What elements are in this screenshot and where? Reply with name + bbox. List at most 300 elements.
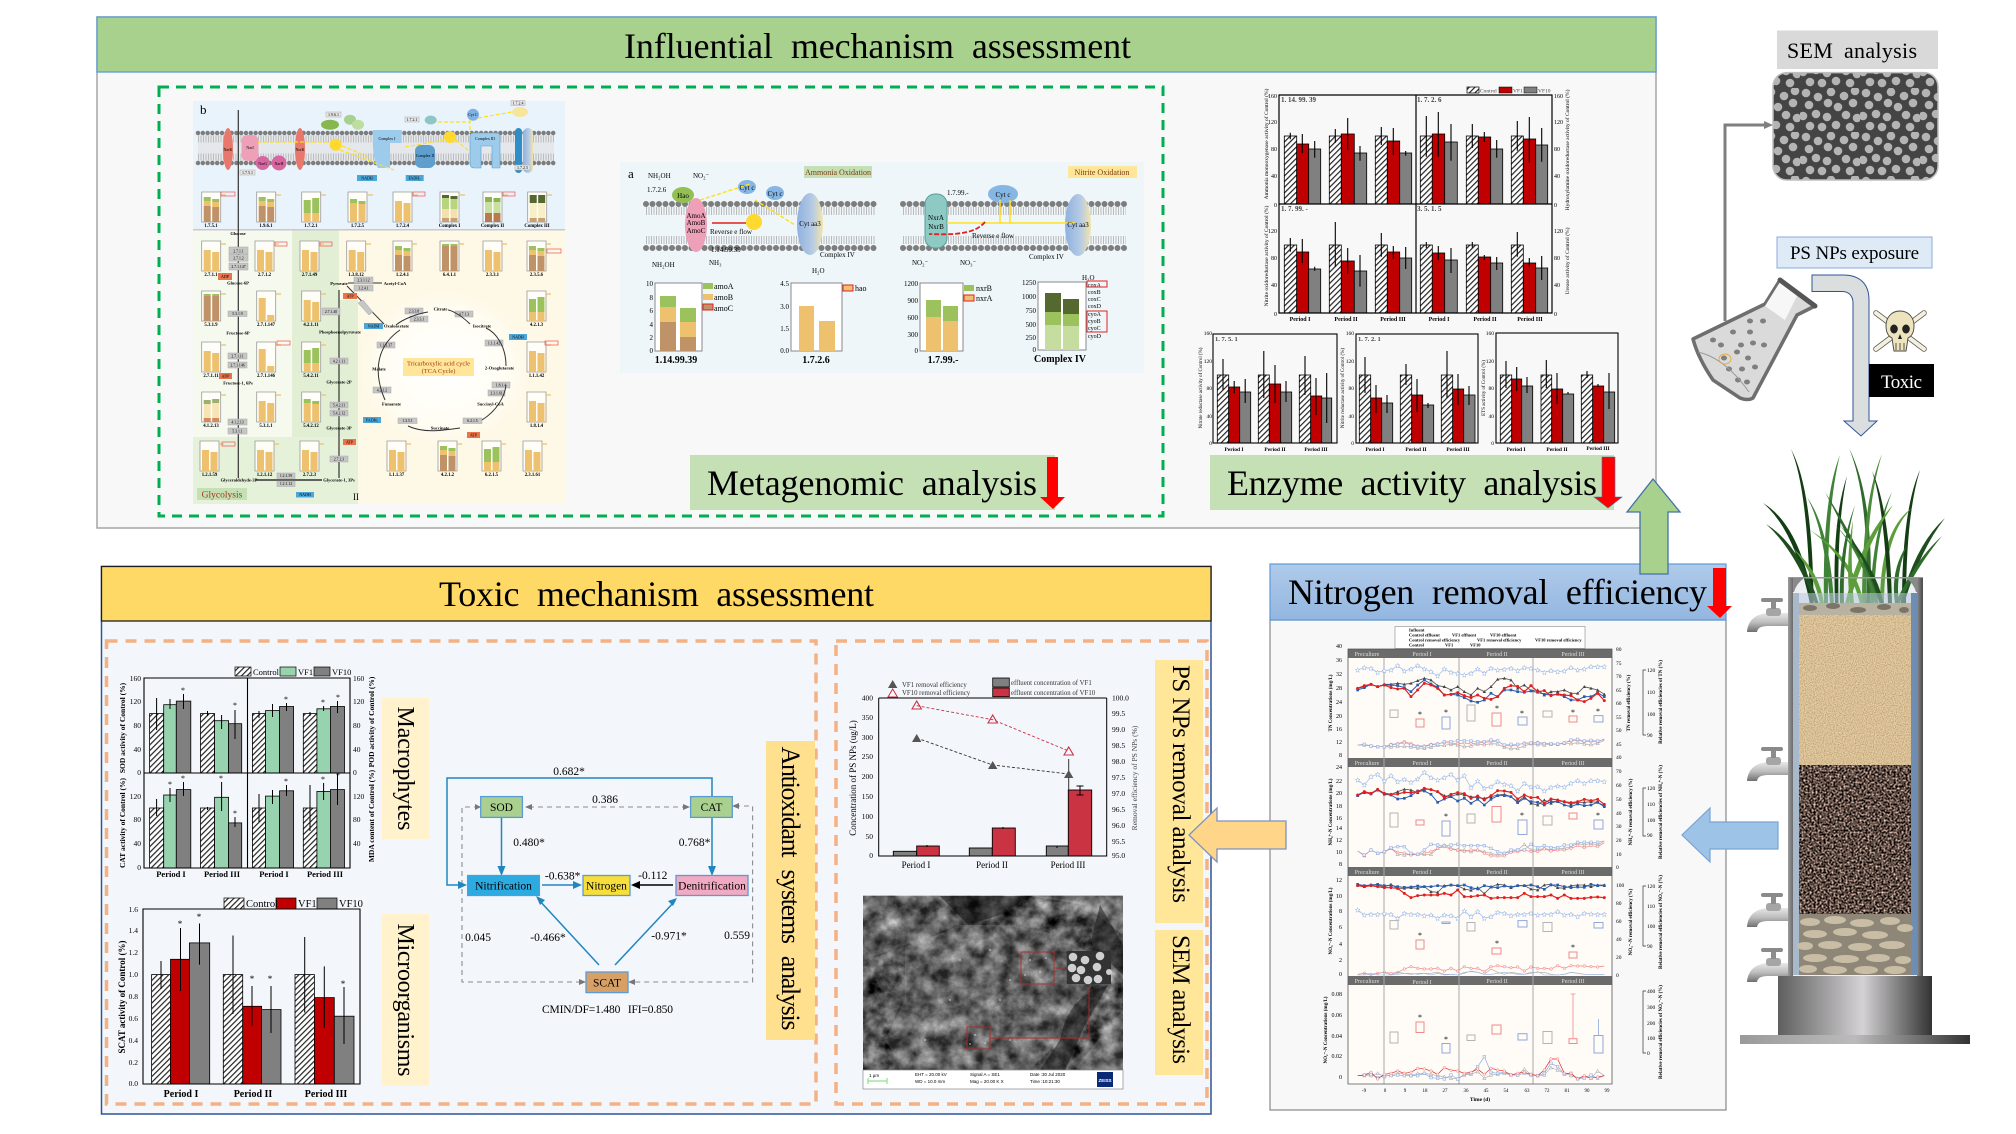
mini bar charts: 1.8.1.4 bbox=[530, 424, 544, 429]
label: PS NPs exposure bbox=[1777, 237, 1932, 268]
mini bar charts: Complex III bbox=[524, 224, 550, 229]
error bars bbox=[157, 694, 338, 831]
time series charts: * bbox=[1444, 1035, 1448, 1044]
axes: 40 bbox=[134, 745, 141, 754]
axes labels: nitrogen charts: 0 bbox=[1616, 973, 1619, 979]
mini bar charts: 1.2.4.1 bbox=[396, 273, 410, 278]
enzyme box labels: 4.7.1.3 bbox=[459, 312, 469, 316]
chart: ETS: 120 bbox=[1486, 359, 1494, 365]
axes labels: nitrogen charts: 8 bbox=[1339, 753, 1342, 759]
caption strip: Signal A = SE1 bbox=[970, 1072, 1000, 1077]
cofactor tags: NADH bbox=[512, 334, 524, 340]
mini bar charts: 2.3.1.61 bbox=[525, 473, 541, 478]
axes labels: nitrogen charts: 40 bbox=[1616, 937, 1622, 943]
enzyme box labels: 2.3.3.8 bbox=[409, 310, 419, 314]
legend: VF10 bbox=[1538, 88, 1551, 94]
mini bar charts: 2.7.1.2 bbox=[258, 273, 272, 278]
chart: 1.7.99.-: 0 bbox=[914, 347, 918, 355]
chart: 1.7.2.1: Period III bbox=[1446, 447, 1470, 453]
mini bar charts: 2.7.1.49 bbox=[302, 273, 318, 278]
axes labels: nitrogen charts: 55 bbox=[1616, 715, 1622, 721]
chart: complex IV: 1000 bbox=[1022, 293, 1036, 301]
heading: nitrogen removal efficiency bbox=[1270, 564, 1726, 620]
error bars bbox=[161, 924, 344, 1044]
time series charts: Period II bbox=[1486, 979, 1508, 985]
axes: 1.6 bbox=[129, 905, 138, 914]
orange dashed frame: antioxidant systems bbox=[106, 641, 816, 1104]
time series charts: * bbox=[1495, 939, 1499, 948]
metabolite labels: Phosphoenolpyruvate bbox=[319, 330, 361, 334]
axes labels: nitrogen charts: 60 bbox=[1616, 783, 1622, 789]
row: NO3 bbox=[1358, 884, 1604, 975]
chart: 1.7.2.6: 4.5 bbox=[780, 280, 790, 288]
mini bar charts: 4.2.1.11 bbox=[303, 323, 319, 328]
cofactor tags: ATP bbox=[346, 440, 354, 444]
orange dashed frame: removal and SEM bbox=[836, 641, 1207, 1104]
enzyme box labels: 2.7.1.1 bbox=[233, 250, 244, 254]
legend box bbox=[1395, 626, 1585, 648]
panel tags and axes: 0 bbox=[1554, 312, 1557, 318]
enzyme box labels: 1.8.1.4 bbox=[496, 384, 506, 388]
cofactor tags: NADH bbox=[368, 324, 379, 328]
enzyme box labels: 2.3.1.12 bbox=[357, 278, 370, 282]
panel tags and axes: Period II bbox=[1473, 317, 1497, 323]
axes labels: nitrogen charts: 27 bbox=[1442, 1089, 1448, 1094]
axes labels: nitrogen charts: 60 bbox=[1616, 919, 1622, 925]
proteins: Complex IV bbox=[1029, 253, 1064, 261]
chart: 1.7.2.1: 80 bbox=[1348, 386, 1354, 392]
proteins: NxrB bbox=[928, 223, 944, 231]
TCA cycle bbox=[372, 306, 514, 431]
axes labels: nitrogen charts: 50 bbox=[1616, 797, 1622, 803]
panel: toxic mechanism assessment bbox=[102, 566, 1211, 1114]
chart: 1.7.2.1: Period I bbox=[1365, 447, 1385, 453]
column walls bbox=[1788, 578, 1923, 981]
proteins: NO₂⁻ bbox=[693, 172, 710, 180]
axes: 40 bbox=[353, 839, 361, 848]
mini bar charts: 4.1.2.13 bbox=[203, 424, 219, 429]
axes: Period I bbox=[156, 869, 186, 879]
proteins: Reverse e flow bbox=[972, 232, 1015, 240]
chart: 1.7.99.-: 1.7.99.- bbox=[928, 355, 958, 366]
figure a: ammonia and nitrite oxidation: a bbox=[628, 166, 634, 181]
label: antioxidant systems analysis bbox=[766, 741, 815, 1040]
arrow: column to nitrogen bbox=[1682, 808, 1778, 862]
legend box: VF1 removal efficiency bbox=[1477, 638, 1522, 642]
caption strip: Time :10:21:30 bbox=[1030, 1079, 1060, 1084]
inset bbox=[1067, 951, 1112, 984]
chart: 1.14.99.39: 6 bbox=[650, 307, 654, 315]
proteins: NxrA bbox=[928, 214, 944, 222]
axes: 120 bbox=[130, 792, 141, 801]
chart: complex IV: cyoC bbox=[1088, 326, 1101, 332]
panel tags and axes: 1. 7. 99. - bbox=[1281, 205, 1308, 213]
axes labels: nitrogen charts: 0.04 bbox=[1332, 1034, 1342, 1040]
label: PS NPs removal analysis bbox=[1155, 660, 1203, 923]
TCA label: Tricarboxylic acid cycle bbox=[407, 360, 470, 368]
legend box: VF10 effluent bbox=[1490, 632, 1517, 638]
chart: PS NPs removal: Period I bbox=[902, 860, 930, 870]
chart: 1.7.2.6: 3.0 bbox=[780, 303, 790, 311]
chart: 1.7.5.1: 0 bbox=[1209, 441, 1212, 447]
panel tags and axes: Period I bbox=[1429, 317, 1450, 323]
cofactor tags: ADP bbox=[221, 274, 230, 279]
axes labels: nitrogen charts: 10 bbox=[1336, 894, 1342, 900]
panel tags and axes: 0 bbox=[1274, 312, 1277, 318]
chart: 1.7.2.1: 40 bbox=[1348, 414, 1354, 420]
proteins: Cyt c bbox=[768, 190, 782, 198]
proteins: AmoA bbox=[686, 212, 706, 220]
axes labels: nitrogen charts: 0 bbox=[1647, 1051, 1650, 1057]
panel tags and axes: 80 bbox=[1271, 147, 1277, 153]
chart: complex IV bbox=[1022, 279, 1107, 365]
path coefficients: 0.480* bbox=[513, 837, 545, 849]
axes labels: nitrogen charts: 0 bbox=[1339, 972, 1342, 978]
chart: 1.7.5.1: Period I bbox=[1224, 447, 1244, 453]
membrane proteins: NorK bbox=[295, 147, 305, 152]
axes: 40 bbox=[134, 839, 141, 848]
metabolic pathway map: b bbox=[200, 102, 206, 117]
enzyme box labels: 6.2.1.5 bbox=[467, 419, 478, 423]
arrow: nitrogen to influential mechanism bbox=[1627, 479, 1680, 574]
axes: * bbox=[168, 780, 172, 789]
time series charts: Period I bbox=[1412, 761, 1432, 767]
enzyme box labels: 2.7.1.40 bbox=[325, 310, 337, 314]
time series charts: * bbox=[1444, 708, 1448, 717]
chart: PS NPs removal: 99.5 bbox=[1112, 709, 1125, 718]
axes labels: nitrogen charts: 2 bbox=[1339, 958, 1342, 964]
TCA cycle: Isocitrate bbox=[473, 324, 491, 328]
proteins: Cyt c bbox=[740, 184, 754, 192]
proteins: AmoB bbox=[687, 219, 706, 227]
axes labels: nitrogen charts: 18 bbox=[1336, 804, 1342, 810]
axes labels: nitrogen charts: 24 bbox=[1336, 765, 1342, 771]
panel tags and axes: Period I bbox=[1290, 317, 1311, 323]
chart: PS NPs removal: 250 bbox=[862, 752, 873, 761]
axes labels: nitrogen charts: 70 bbox=[1616, 769, 1622, 775]
axes labels: nitrogen charts: 20 bbox=[1336, 714, 1342, 720]
chart: complex IV: 750 bbox=[1026, 307, 1036, 315]
axes labels: nitrogen charts: 0.02 bbox=[1332, 1054, 1342, 1060]
label: PS NPs exposure: PS NPs exposure bbox=[1790, 243, 1919, 264]
label: enzyme activity analysis bbox=[1210, 455, 1614, 510]
glycolysis pathway lines bbox=[238, 110, 384, 480]
axes labels: nitrogen charts: 110 bbox=[1647, 690, 1655, 696]
chart: ETS bbox=[1482, 331, 1618, 453]
legend box: VF1 bbox=[1445, 642, 1454, 648]
axes: Period III bbox=[305, 1089, 347, 1100]
constructed wetland column bbox=[1740, 448, 1970, 1044]
axes labels: nitrogen charts: 90 bbox=[1647, 833, 1653, 839]
legend bbox=[1467, 87, 1551, 94]
axes: * bbox=[233, 809, 237, 818]
caption strip: ZEISS bbox=[1098, 1078, 1112, 1083]
axes labels: nitrogen charts: 24 bbox=[1336, 700, 1342, 706]
time series charts: * bbox=[1571, 708, 1575, 717]
axes labels: nitrogen charts: 50 bbox=[1616, 728, 1622, 734]
time series charts: Preculture bbox=[1355, 652, 1380, 658]
axes labels: nitrogen charts: 75 bbox=[1616, 661, 1622, 667]
panel tags and axes: Period II bbox=[1334, 317, 1358, 323]
axes labels: nitrogen charts: 28 bbox=[1336, 686, 1342, 692]
cofactor tags: ATP bbox=[470, 432, 478, 438]
axes: CAT activity of Control (%) bbox=[118, 778, 127, 868]
label: microorganisms bbox=[382, 914, 429, 1086]
axes labels: nitrogen charts: 200 bbox=[1647, 1021, 1656, 1027]
chart: PS NPs removal: 99.0 bbox=[1112, 725, 1125, 734]
legend: VF1 bbox=[298, 899, 317, 910]
axes: * bbox=[284, 777, 288, 786]
axes labels: nitrogen charts: 12 bbox=[1336, 878, 1342, 884]
SEM micrograph bbox=[863, 896, 1123, 1089]
enzyme activity charts bbox=[1199, 87, 1618, 453]
time series charts: Period III bbox=[1561, 979, 1585, 985]
mini bar charts: 4.2.1.3 bbox=[530, 323, 544, 328]
proteins: H₂O bbox=[812, 267, 825, 275]
panel tags and axes: 1. 14. 99. 39 bbox=[1281, 96, 1316, 104]
proteins: AmoC bbox=[687, 227, 706, 235]
chart: PS NPs removal: Period III bbox=[1051, 860, 1085, 870]
chart: PS NPs removal: 96.0 bbox=[1112, 821, 1125, 830]
node: Nitrification bbox=[468, 876, 539, 896]
axes: 40 bbox=[353, 745, 361, 754]
axes labels: nitrogen charts: NH₄⁺-N Concentrations (mg/L) bbox=[1328, 778, 1334, 845]
TCA cycle: Succinate bbox=[431, 426, 449, 430]
tag: nitrite oxidation: Nitrite Oxidation bbox=[1075, 168, 1129, 177]
proteins: 1.7.2.6 bbox=[647, 186, 667, 194]
panel tags and axes: 160 bbox=[1268, 94, 1277, 100]
axes: Period III bbox=[307, 869, 344, 879]
panel tags and axes: Urease activity of Control (%) bbox=[1564, 227, 1571, 294]
chart: complex IV: coxD bbox=[1088, 304, 1102, 310]
membrane proteins: 1.7.2.5 bbox=[517, 165, 528, 170]
membrane proteins: NADH bbox=[361, 176, 373, 180]
legend: effluent concentration of VF10 bbox=[1011, 690, 1096, 697]
time series charts: Period II bbox=[1486, 761, 1508, 767]
TCA cycle: Fumarate bbox=[382, 402, 401, 406]
chart: 1.7.5.1: 160 bbox=[1204, 331, 1212, 337]
legend box: Control bbox=[1409, 642, 1425, 648]
legend: VF10 removal efficiency bbox=[902, 690, 971, 697]
legend bbox=[224, 898, 363, 910]
TCA cycle: Oxaloacetate bbox=[384, 324, 409, 328]
time series charts: Period III bbox=[1561, 652, 1585, 658]
label: metagenomic analysis: Metagenomic analysis bbox=[707, 463, 1037, 503]
axes labels: nitrogen charts: 12 bbox=[1336, 838, 1342, 844]
pathway enzyme boxes bbox=[228, 247, 510, 486]
chart: PS NPs removal: Concentration of PS NPs (ug/L) bbox=[848, 720, 858, 836]
axes labels: nitrogen charts: 10 bbox=[1336, 850, 1342, 856]
label: macrophytes: Macrophytes bbox=[392, 706, 418, 830]
arrow: red decrease nitrogen bbox=[1707, 568, 1732, 618]
panel tags and axes: 0 bbox=[1274, 203, 1277, 209]
box plots bbox=[1390, 705, 1603, 1053]
mini bar charts: 2.3.5.6 bbox=[530, 273, 544, 278]
chart: 1.14.99.39: 4 bbox=[650, 321, 654, 329]
panel tags and axes: 40 bbox=[1271, 283, 1277, 289]
mini bar charts: 1.7.2.5 bbox=[351, 224, 365, 229]
node: SOD: SOD bbox=[490, 802, 513, 814]
axes labels: nitrogen charts: 99 bbox=[1604, 1089, 1610, 1094]
label: microorganisms: Microorganisms bbox=[392, 924, 418, 1076]
chart: 1.7.5.1: 120 bbox=[1204, 359, 1212, 365]
axes: 0 bbox=[137, 863, 141, 872]
axes bbox=[879, 698, 1107, 856]
axes labels: nitrogen charts: 0 bbox=[1339, 1075, 1342, 1081]
chart: 1.14.99.39 bbox=[646, 280, 734, 366]
bars: top grid bbox=[1284, 134, 1548, 313]
axes: * bbox=[178, 919, 183, 929]
axes labels: nitrogen charts: 54 bbox=[1504, 1089, 1509, 1094]
path coefficients: -0.971* bbox=[651, 930, 687, 942]
legend bbox=[888, 678, 1096, 697]
membrane proteins: 1.7.5.1 bbox=[242, 170, 253, 175]
TCA cycle: Malate bbox=[372, 366, 386, 372]
chart: 1.7.99.-: nxrB bbox=[976, 284, 992, 293]
icon: flask bbox=[1693, 280, 1815, 400]
mini bar charts: 1.9.6.1 bbox=[259, 224, 273, 229]
membrane proteins: 1.7.2.1 bbox=[406, 117, 418, 122]
axes labels: nitrogen charts: 45 bbox=[1616, 742, 1622, 748]
axes labels: nitrogen charts: 81 bbox=[1564, 1089, 1570, 1094]
axes labels: nitrogen charts: 14 bbox=[1336, 826, 1342, 832]
mini bar charts: 1.7.5.1 bbox=[204, 224, 218, 229]
chart: ETS: ETS activity of Control (%) bbox=[1482, 360, 1487, 416]
gravel layer bbox=[1799, 765, 1911, 914]
chart: ETS: 40 bbox=[1488, 414, 1494, 420]
axes: 1.0 bbox=[129, 970, 138, 979]
axes labels: nitrogen charts: 16 bbox=[1336, 727, 1342, 733]
path coefficients: -0.638* bbox=[545, 870, 581, 882]
panel tags and axes: 40 bbox=[1271, 174, 1277, 180]
panel tags and axes: 40 bbox=[1554, 283, 1560, 289]
axes labels: nitrogen charts: TN removal efficiency (%) bbox=[1627, 674, 1632, 731]
panel tags and axes: 0 bbox=[1554, 203, 1557, 209]
TCA label: (TCA Cycle) bbox=[422, 368, 455, 375]
proteins bbox=[647, 172, 1095, 282]
time series charts: Period II bbox=[1486, 870, 1508, 876]
chart: ETS: Period II bbox=[1546, 447, 1568, 453]
legend: VF1 removal efficiency bbox=[902, 682, 967, 689]
time series charts: * bbox=[1520, 811, 1524, 820]
panel: nitrogen removal efficiency bbox=[1270, 564, 1726, 1110]
axes labels: nitrogen charts: 100 bbox=[1647, 1036, 1656, 1042]
chart: PS NPs removal: 350 bbox=[862, 713, 873, 722]
axes labels: nitrogen charts: 40 bbox=[1616, 755, 1622, 761]
chart: 1.7.5.1: 40 bbox=[1206, 414, 1212, 420]
glass rear bbox=[1788, 577, 1923, 981]
axes bbox=[117, 905, 347, 1100]
panel tags and axes: 120 bbox=[1268, 120, 1277, 126]
enzyme box labels bbox=[230, 250, 506, 486]
chart: complex IV: cyoA bbox=[1088, 312, 1102, 318]
axes: 120 bbox=[353, 697, 364, 706]
axes: * bbox=[321, 775, 325, 784]
time series charts: * bbox=[1520, 709, 1524, 718]
path coefficients: -0.112 bbox=[638, 870, 668, 882]
axes labels: nitrogen charts: TN Concentrations (mg/L) bbox=[1329, 674, 1334, 731]
chart: PS NPs removal: 100 bbox=[862, 812, 873, 821]
axes: Period I bbox=[259, 869, 289, 879]
legend: VF10 bbox=[339, 899, 363, 910]
mini bar charts: 5.3.1.9 bbox=[204, 323, 218, 328]
axes labels: nitrogen charts: 100 bbox=[1647, 818, 1656, 824]
node: SCAT: SCAT bbox=[593, 978, 621, 990]
axes labels: nitrogen charts: 80 bbox=[1616, 647, 1622, 653]
frame: top grid bbox=[1279, 95, 1552, 313]
membrane proteins: NarI bbox=[246, 145, 254, 150]
enzyme box labels: 5.4.2.11 bbox=[333, 404, 345, 408]
metabolic pathway map bbox=[193, 100, 565, 504]
axes: * bbox=[219, 774, 223, 783]
axes: 0 bbox=[137, 768, 141, 777]
chart: 1.7.2.6: 1.5 bbox=[780, 325, 790, 333]
label: antioxidant systems analysis: Antioxidant systems analysis bbox=[776, 746, 805, 1030]
mini bar charts: 2.7.1.146 bbox=[257, 374, 276, 379]
enzyme box labels: 4.2.1.2 bbox=[377, 388, 387, 392]
axes: SCAT activity of Control (%) bbox=[117, 940, 127, 1054]
axes labels: nitrogen charts: NO₃⁻-N removal efficiency (%) bbox=[1629, 888, 1634, 955]
axes labels: nitrogen charts: 70 bbox=[1616, 674, 1622, 680]
axes: * bbox=[233, 701, 237, 710]
bars bbox=[893, 790, 1092, 856]
membrane proteins bbox=[223, 100, 533, 181]
base bbox=[1778, 976, 1932, 1035]
legend box: Influent bbox=[1409, 628, 1425, 632]
red magnification marks bbox=[967, 952, 1089, 1049]
heading: nitrogen removal efficiency: Nitrogen removal efficiency bbox=[1288, 572, 1707, 612]
label: enzyme activity analysis: Enzyme activity analysis bbox=[1227, 463, 1597, 503]
tag: nitrite oxidation bbox=[1068, 166, 1137, 178]
removal efficiency lines bbox=[912, 701, 1073, 790]
chart: ETS: 160 bbox=[1486, 331, 1494, 337]
chart: PS NPs removal: 97.0 bbox=[1112, 789, 1125, 798]
axes: * bbox=[197, 912, 202, 922]
axes labels: nitrogen charts: 20 bbox=[1616, 838, 1622, 844]
membrane proteins: Complex III bbox=[475, 136, 495, 141]
mini bar charts: Complex II bbox=[481, 224, 504, 229]
panel tags and axes: 80 bbox=[1554, 147, 1560, 153]
axes labels: nitrogen charts: 65 bbox=[1616, 688, 1622, 694]
membrane proteins: Complex II bbox=[416, 153, 435, 158]
chart: 1.7.5.1: Period II bbox=[1264, 447, 1286, 453]
axes labels: nitrogen charts: 60 bbox=[1616, 701, 1622, 707]
path coefficients: 0.045 bbox=[465, 932, 491, 944]
enzyme box labels: 5.3.1.1 bbox=[232, 430, 243, 434]
chart: 1.7.5.1: 80 bbox=[1206, 386, 1212, 392]
chart: 1.7.5.1: Period III bbox=[1304, 447, 1328, 453]
panel tags and axes: Period III bbox=[1380, 317, 1406, 323]
axes labels: nitrogen charts: 0 bbox=[1616, 865, 1619, 871]
arrow: enzyme decrease bbox=[1594, 457, 1622, 508]
axes labels: nitrogen charts: 6 bbox=[1339, 925, 1342, 931]
top pebble layer bbox=[1799, 603, 1911, 615]
proteins: Complex IV bbox=[820, 251, 855, 259]
chart: 1.7.99.-: nxrA bbox=[976, 294, 993, 303]
time series charts: * bbox=[1418, 710, 1422, 719]
chart: 1.14.99.39: 0 bbox=[650, 347, 654, 355]
membrane proteins: NarH bbox=[275, 161, 284, 166]
legend: effluent concentration of VF1 bbox=[1011, 680, 1092, 687]
plants bbox=[1763, 448, 1945, 604]
axes labels: nitrogen charts bbox=[1324, 644, 1664, 1103]
enzyme box labels: 1.2.4.1 bbox=[358, 286, 369, 290]
axes labels: nitrogen charts: 63 bbox=[1524, 1089, 1530, 1094]
axes: * bbox=[181, 686, 185, 695]
proteins: NH₂OH bbox=[652, 261, 675, 269]
chart: 1.7.99.- bbox=[904, 280, 993, 366]
legend: Control bbox=[1480, 88, 1497, 94]
